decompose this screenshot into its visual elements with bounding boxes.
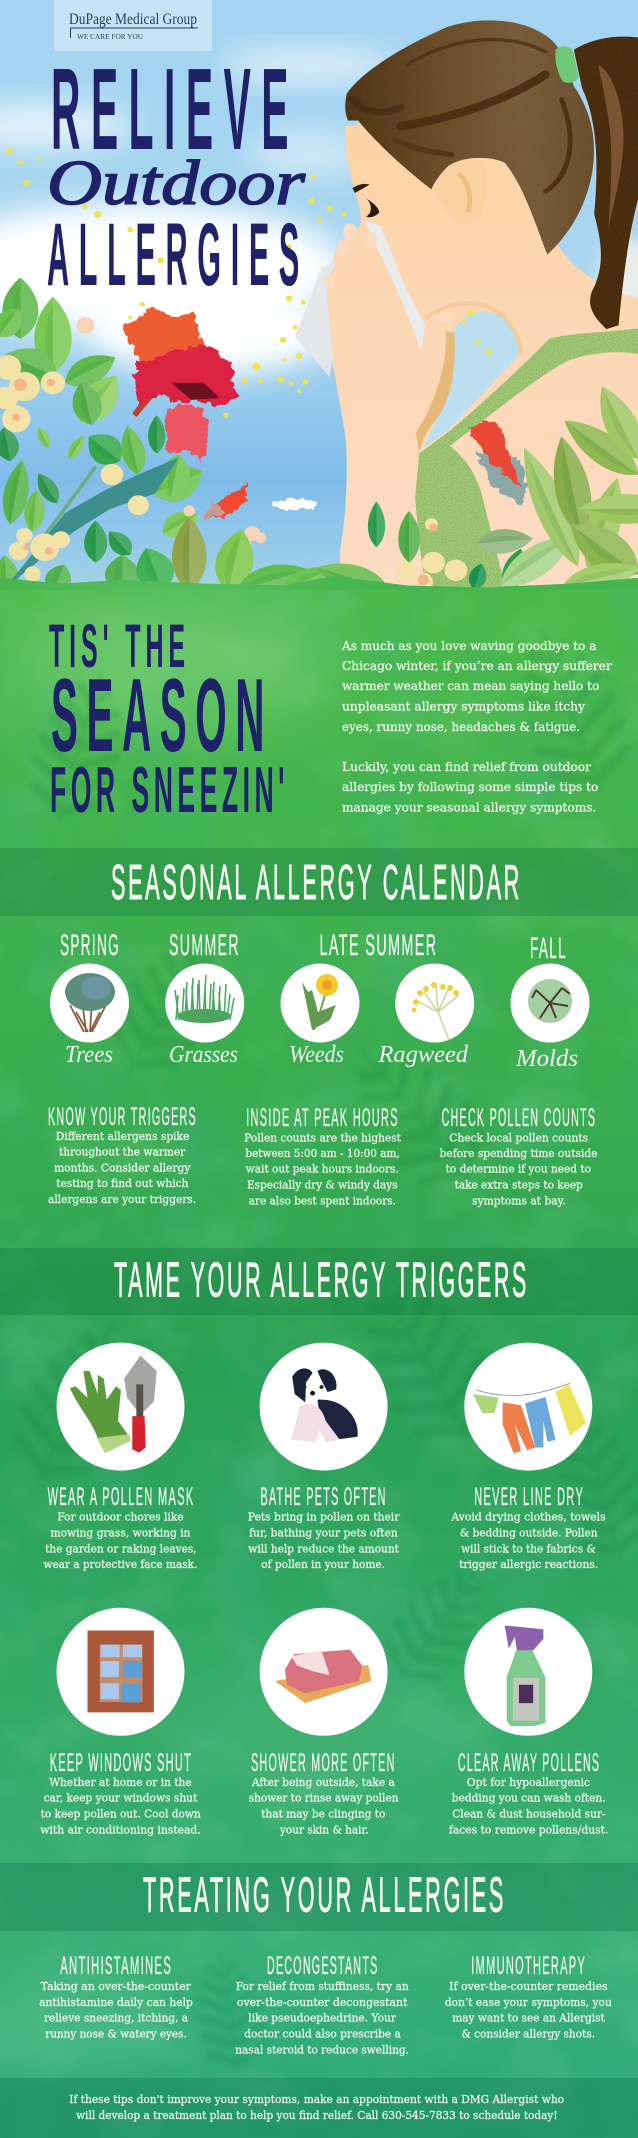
allergen labels: Grasses bbox=[169, 1042, 238, 1068]
footer band: If these tips don't improve your symptoms, make an appointment with a DMG Allergist who bbox=[69, 2093, 564, 2106]
tip: check pollen counts: before spending time outside bbox=[440, 1147, 598, 1160]
footer band bbox=[0, 2078, 638, 2138]
tip: bathe pets often: Pets bring in pollen on their bbox=[248, 1510, 400, 1524]
tip: keep windows shut: car, keep your windows shut bbox=[44, 1792, 198, 1804]
text: SHOWER MORE OFTEN bbox=[251, 1749, 396, 1777]
tip: check pollen counts: Check local pollen counts bbox=[449, 1132, 588, 1144]
treatment: decongestants: over-the-counter decongestant bbox=[237, 1996, 408, 2009]
tip: never line dry: & bedding outside. Pollen bbox=[460, 1526, 598, 1540]
tip: clear away pollens bbox=[449, 1749, 608, 1836]
foliage bottom bbox=[105, 501, 582, 605]
intro text: warmer weather can mean saying hello to bbox=[342, 679, 599, 693]
tip: know your triggers: allergens are your triggers. bbox=[48, 1193, 196, 1206]
allergen labels bbox=[65, 1042, 578, 1072]
icon circle: glove and trowel bbox=[56, 1343, 184, 1471]
tip: shower more often bbox=[249, 1749, 398, 1836]
icon circle: spray bottle bbox=[464, 1608, 592, 1736]
green tank top bbox=[415, 328, 638, 600]
tip: check pollen counts: symptoms at bay. bbox=[472, 1195, 566, 1208]
treatment: decongestants: DECONGESTANTS bbox=[267, 1952, 378, 1980]
tip: inside at peak hours: are also best spent indoors. bbox=[249, 1195, 396, 1208]
icon: ragweed bbox=[395, 964, 474, 1042]
treatment: immunotherapy: If over-the-counter remedies bbox=[449, 1980, 608, 1993]
treatment: decongestants: like pseudoephedrine. Your bbox=[248, 2012, 397, 2025]
icon circle: soap bbox=[260, 1608, 388, 1736]
blossoms bbox=[0, 317, 467, 591]
hair bbox=[345, 20, 594, 254]
hair strands bbox=[352, 40, 570, 191]
icon: grasses bbox=[165, 964, 244, 1042]
tip: wear a pollen mask: For outdoor chores like bbox=[57, 1510, 184, 1524]
tip: clear away pollens: bedding you can wash often. bbox=[452, 1792, 606, 1804]
tip: keep windows shut: Whether at home or in the bbox=[49, 1776, 192, 1789]
tip: know your triggers: testing to find out which bbox=[56, 1177, 189, 1190]
crimson petals bbox=[135, 344, 240, 406]
allergen labels: Ragweed bbox=[377, 1042, 469, 1068]
eyebrow and lashes bbox=[352, 184, 370, 193]
band: tame your allergy triggers bbox=[0, 1248, 638, 1315]
tip: shower more often: shower to rinse away pollen bbox=[249, 1792, 398, 1804]
tip: shower more often: After being outside, take a bbox=[251, 1776, 395, 1789]
foliage right bbox=[510, 380, 638, 600]
teal stem leaf bbox=[4, 457, 179, 589]
icon: molds bbox=[510, 964, 590, 1042]
tip: keep windows shut: with air conditioning instead. bbox=[40, 1823, 201, 1836]
season labels: SUMMER bbox=[169, 929, 240, 962]
tip: never line dry: will stick to the fabrics & bbox=[461, 1542, 596, 1556]
tip: keep windows shut bbox=[40, 1749, 201, 1836]
hero illustration bbox=[0, 0, 638, 605]
heading: tis the season bbox=[49, 612, 289, 826]
intro text: Chicago winter, if you’re an allergy sufferer bbox=[342, 659, 612, 673]
pink bud petal bbox=[167, 403, 208, 461]
text: FALL bbox=[530, 932, 567, 965]
tip: clear away pollens: Opt for hypoallergenic bbox=[467, 1776, 590, 1789]
foliage left bbox=[0, 277, 210, 598]
intro text: allergies by following some simple tips to bbox=[342, 780, 598, 794]
season labels: SPRING bbox=[60, 929, 120, 962]
woman sneezing bbox=[295, 20, 638, 600]
tip: wear a pollen mask: mowing grass, working in bbox=[50, 1526, 190, 1540]
tip: bathe pets often: of pollen in your home. bbox=[261, 1558, 385, 1571]
tip: inside at peak hours: Pollen counts are the highest bbox=[244, 1132, 401, 1144]
title bbox=[47, 44, 309, 304]
trigger icons bbox=[56, 1343, 592, 1736]
intro text: eyes, runny nose, headaches & fatigue. bbox=[342, 720, 580, 734]
tip: check pollen counts: take extra steps to keep bbox=[455, 1179, 583, 1192]
treatment: immunotherapy bbox=[445, 1952, 612, 2041]
season labels: LATE SUMMER bbox=[320, 929, 438, 962]
tip: know your triggers: months. Consider allergy bbox=[54, 1162, 191, 1174]
text: KEEP WINDOWS SHUT bbox=[50, 1749, 192, 1777]
tip: know your triggers: throughout the warmer bbox=[59, 1146, 186, 1158]
icon circle: laundry line bbox=[464, 1343, 592, 1471]
text: SEASON bbox=[51, 658, 273, 774]
treatment: antihistamines bbox=[39, 1952, 193, 2041]
intro text: manage your seasonal allergy symptoms. bbox=[342, 800, 596, 814]
small red bud bbox=[204, 484, 247, 520]
tip: shower more often: your skin & hair. bbox=[279, 1823, 369, 1836]
allergen labels: Molds bbox=[515, 1046, 578, 1072]
tip: bathe pets often: will help reduce the amount bbox=[248, 1542, 399, 1556]
tip: wear a pollen mask bbox=[44, 1483, 197, 1571]
tip: inside at peak hours: between 5:00 am - 10:00 am, bbox=[245, 1147, 400, 1160]
tip: clear away pollens: Clean & dust household sur- bbox=[452, 1808, 606, 1820]
text: WEAR A POLLEN MASK bbox=[48, 1483, 195, 1511]
tip: never line dry: trigger allergic reactions. bbox=[459, 1558, 598, 1571]
red flower bbox=[45, 308, 240, 536]
treatment: antihistamines: ANTIHISTAMINES bbox=[60, 1952, 172, 1980]
skin of face, arm and back bbox=[326, 115, 638, 600]
tissue bbox=[364, 220, 425, 350]
intro text: unpleasant allergy symptoms like itchy bbox=[342, 700, 585, 714]
band: treating your allergies bbox=[0, 1863, 638, 1931]
text: INSIDE AT PEAK HOURS bbox=[246, 1104, 399, 1132]
treatment: decongestants: doctor could also prescribe a bbox=[244, 2028, 401, 2041]
treatment: antihistamines: antihistamine daily can help bbox=[39, 1996, 193, 2009]
ponytail bbox=[574, 37, 638, 329]
tip: keep windows shut: to keep pollen out. Cool down bbox=[41, 1808, 201, 1820]
treatment: antihistamines: Taking an over-the-counter bbox=[41, 1980, 192, 1993]
tip: check pollen counts: to determine if you need to bbox=[446, 1163, 591, 1176]
tip: never line dry: Avoid drying clothes, towels bbox=[450, 1510, 606, 1524]
treatment: decongestants: nasal steroid to reduce swelling. bbox=[235, 2043, 409, 2056]
icon: trees bbox=[50, 964, 129, 1042]
tip: know your triggers bbox=[48, 1103, 197, 1206]
logo name: DuPage Medical Group bbox=[69, 11, 197, 28]
clouds bbox=[0, 50, 638, 510]
tip: know your triggers: Different allergens spike bbox=[56, 1130, 189, 1143]
tip: wear a pollen mask: wear a protective face mask. bbox=[44, 1558, 197, 1571]
treatment: antihistamines: relieve sneezing, itching, a bbox=[44, 2012, 189, 2025]
treatment: antihistamines: runny nose & watery eyes. bbox=[45, 2028, 187, 2041]
background ferns bbox=[0, 615, 638, 2075]
text: KNOW YOUR TRIGGERS bbox=[48, 1103, 197, 1131]
tip: inside at peak hours bbox=[244, 1104, 401, 1208]
tip: clear away pollens: faces to remove pollens/dust. bbox=[449, 1823, 608, 1836]
heading: tis the season: TIS' THE bbox=[49, 612, 190, 680]
season labels bbox=[60, 929, 567, 965]
sky gap between arm and strap bbox=[423, 312, 519, 448]
footer band: will develop a treatment plan to help you find relief. Call 630-545-7833 to schedule today! bbox=[76, 2109, 558, 2122]
icon circle: puppy bbox=[260, 1343, 388, 1471]
tip: never line dry bbox=[450, 1483, 606, 1571]
tip: bathe pets often bbox=[248, 1483, 400, 1571]
hair tie bbox=[555, 46, 579, 83]
arm shadow bbox=[416, 331, 455, 453]
icon circle: window bbox=[56, 1608, 184, 1736]
orange petals bbox=[123, 308, 228, 371]
green ground strip bbox=[0, 576, 638, 600]
sky background bbox=[0, 0, 638, 600]
treatment: immunotherapy: don’t ease your symptoms, you bbox=[445, 1996, 612, 2009]
neck line bbox=[425, 303, 521, 356]
intro text bbox=[341, 639, 612, 814]
text: BATHE PETS OFTEN bbox=[260, 1483, 387, 1511]
text: FOR SNEEZIN' bbox=[50, 753, 289, 826]
logo tagline: WE CARE FOR YOU bbox=[77, 33, 143, 41]
tip: shower more often: that may be clinging to bbox=[261, 1808, 386, 1820]
pollen dots bbox=[6, 148, 491, 418]
treatment: immunotherapy: may want to see an Allergist bbox=[452, 2012, 605, 2025]
treatment: decongestants bbox=[235, 1952, 409, 2056]
logo rule bbox=[70, 28, 198, 38]
tip: check pollen counts bbox=[440, 1104, 598, 1208]
tip: wear a pollen mask: the garden or raking leaves, bbox=[45, 1542, 197, 1556]
intro text: Luckily, you can find relief from outdoor bbox=[342, 760, 591, 774]
green background bbox=[0, 590, 638, 2138]
tip: inside at peak hours: Especially dry & windy days bbox=[247, 1179, 398, 1192]
tip: inside at peak hours: wait out peak hours indoors. bbox=[246, 1163, 399, 1176]
allergen labels: Weeds bbox=[289, 1042, 344, 1068]
ear bbox=[433, 157, 487, 225]
logo box bbox=[54, 0, 212, 51]
stem bbox=[45, 467, 96, 536]
band: seasonal allergy calendar bbox=[0, 848, 638, 916]
treatment: immunotherapy: & consider allergy shots. bbox=[462, 2028, 595, 2041]
treatment: decongestants: For relief from stuffiness, try an bbox=[236, 1980, 409, 1993]
icon: weeds dandelion bbox=[280, 964, 360, 1042]
red bud right bbox=[469, 421, 527, 505]
fingers bbox=[324, 223, 453, 323]
intro text: As much as you love waving goodbye to a bbox=[341, 639, 596, 653]
tip: bathe pets often: fur, bathing your pets often bbox=[249, 1526, 398, 1540]
allergen labels: Trees bbox=[65, 1042, 113, 1068]
title line: outdoor: Outdoor bbox=[47, 147, 306, 218]
